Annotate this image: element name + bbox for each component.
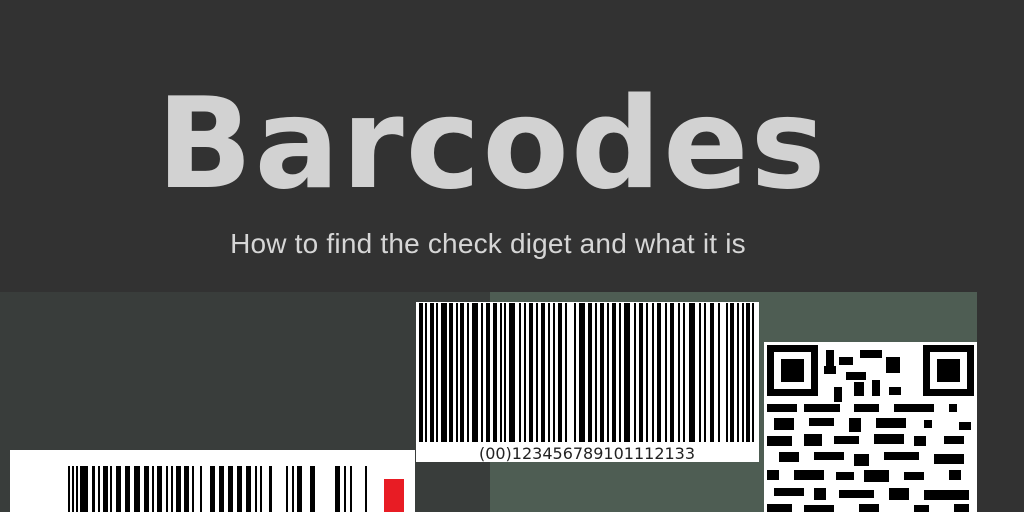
title: Barcodes	[156, 70, 828, 217]
panel: right green	[490, 292, 977, 512]
subtitle: How to find the check diget and what it is	[230, 228, 746, 259]
barcode: bottom-left with red mark	[10, 450, 415, 512]
barcode: GS1-128	[416, 302, 759, 462]
QR code	[764, 342, 977, 512]
panel: left dark	[0, 292, 490, 512]
